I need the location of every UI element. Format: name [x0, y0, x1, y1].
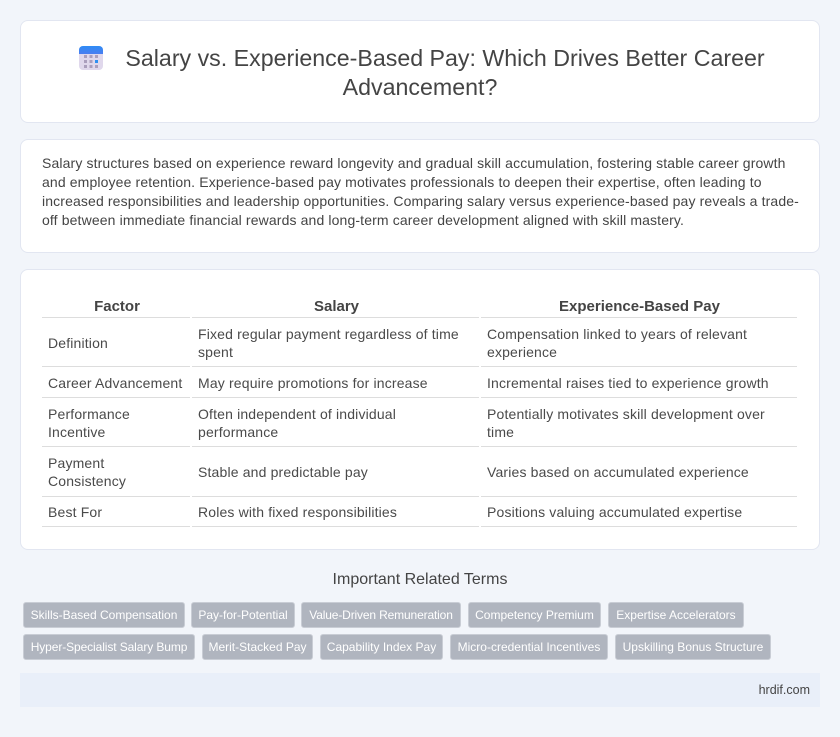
introduction text: Salary structures based on experience reward longevity and gradual skill accumulation, fostering stable career growth — [42, 155, 786, 171]
panel: header — [20, 20, 820, 123]
column headers: Factor — [94, 298, 140, 315]
tag — [23, 634, 195, 660]
tag: Merit-Stacked Pay — [208, 640, 307, 654]
row: best for: Roles with fixed responsibilities — [198, 504, 397, 520]
introduction text: off between immediate financial rewards and long-term career development aligned with skill mastery. — [42, 212, 684, 228]
row: definition: Fixed regular payment regardless of time — [198, 326, 459, 342]
row: payment consistency: Payment — [48, 455, 104, 471]
row: definition: Definition — [48, 335, 108, 351]
tag: Pay-for-Potential — [198, 608, 288, 622]
panel: comparison table — [20, 269, 820, 550]
row: best for — [48, 504, 742, 520]
row: performance incentive — [48, 406, 765, 440]
tag: Upskilling Bonus Structure — [623, 640, 763, 654]
heading: important related terms: Important Related Terms — [333, 571, 507, 588]
tag: Competency Premium — [475, 608, 594, 622]
row: performance incentive: time — [487, 424, 514, 440]
row: career advancement: Career Advancement — [48, 375, 182, 391]
tag — [320, 634, 443, 660]
tag — [450, 634, 608, 660]
row: definition: experience — [487, 344, 557, 360]
row: performance incentive: Incentive — [48, 424, 105, 440]
tag — [191, 602, 295, 628]
tag: Skills-Based Compensation — [31, 608, 177, 622]
introduction text: and employee retention. Experience-based pay motivates professionals to deepen their expertise, often leading to — [42, 174, 762, 190]
comparison table — [42, 298, 797, 527]
row: performance incentive: performance — [198, 424, 278, 440]
panel: introduction — [20, 139, 820, 253]
tag: Expertise Accelerators — [616, 608, 736, 622]
title — [125, 45, 765, 100]
title: Salary vs. Experience-Based Pay: Which Drives Better Career — [125, 45, 765, 71]
row: payment consistency: Stable and predictable pay — [198, 464, 368, 480]
row: best for: Positions valuing accumulated expertise — [487, 504, 742, 520]
column headers: Experience-Based Pay — [559, 298, 720, 315]
row: career advancement: May require promotions for increase — [198, 375, 428, 391]
tag — [202, 634, 313, 660]
title: Advancement? — [343, 74, 497, 100]
tag — [23, 602, 185, 628]
tag — [468, 602, 601, 628]
row: performance incentive: Potentially motivates skill development over — [487, 406, 765, 422]
row: payment consistency — [48, 455, 749, 489]
row: definition: Compensation linked to years of relevant — [487, 326, 747, 342]
row: payment consistency: Varies based on accumulated experience — [487, 464, 749, 480]
tag — [615, 634, 771, 660]
footer source: hrdif.com — [759, 683, 810, 697]
row: career advancement: Incremental raises tied to experience growth — [487, 375, 769, 391]
tag: Value-Driven Remuneration — [309, 608, 453, 622]
tag: Capability Index Pay — [327, 640, 436, 654]
row: best for: Best For — [48, 504, 102, 520]
row: payment consistency: Consistency — [48, 473, 126, 489]
row: career advancement — [48, 375, 769, 391]
row: definition: spent — [198, 344, 233, 360]
column headers: Salary — [314, 298, 359, 315]
introduction text — [42, 155, 799, 228]
column headers — [94, 298, 720, 315]
row: definition — [48, 326, 747, 360]
row: performance incentive: Performance — [48, 406, 130, 422]
tag: Micro-credential Incentives — [458, 640, 600, 654]
related term tags — [23, 602, 771, 660]
tag — [301, 602, 461, 628]
icon: calendar — [79, 46, 103, 70]
tag — [608, 602, 744, 628]
tag: Hyper-Specialist Salary Bump — [31, 640, 187, 654]
row: performance incentive: Often independent of individual — [198, 406, 396, 422]
footer bar — [20, 673, 820, 707]
introduction text: increased responsibilities and leadership opportunities. Comparing salary versus experience-based pay reveals a trade- — [42, 193, 799, 209]
